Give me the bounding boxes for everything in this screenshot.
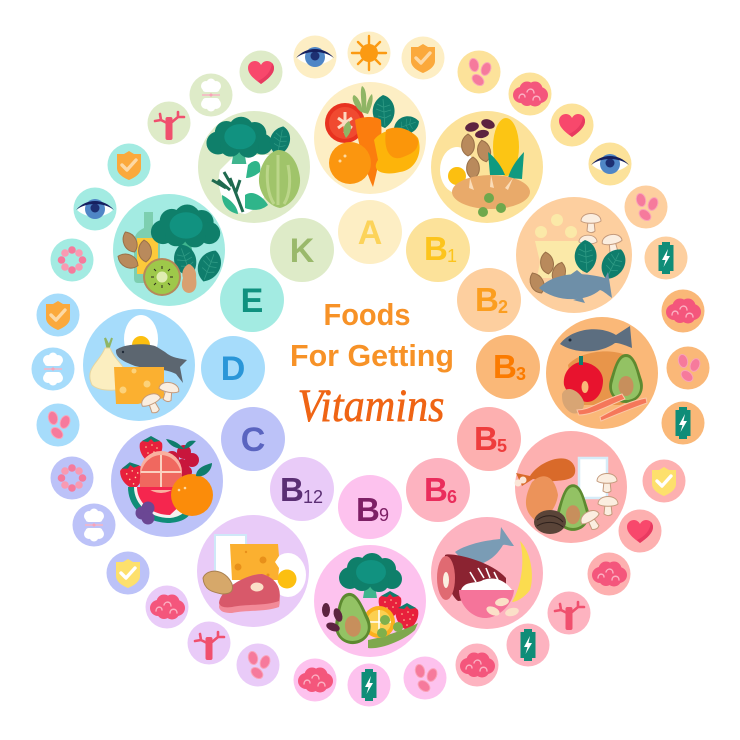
- icon: shield on B5: [642, 460, 686, 502]
- vitamin letter badges: [201, 200, 540, 539]
- badge: C: C: [241, 421, 265, 459]
- badge: E: E: [241, 282, 263, 320]
- icon: bone on D: [32, 348, 74, 390]
- icon: ring on E: [50, 238, 94, 282]
- badge: B2: [457, 268, 521, 332]
- badge: B9: [338, 475, 402, 539]
- icon: blood cells on D: [36, 404, 80, 446]
- icon: blood cells on B2: [624, 186, 668, 228]
- food circle: vitamin B12: [197, 515, 309, 627]
- badge: B12: 12: [303, 487, 323, 507]
- icon: battery on B3: [662, 402, 704, 444]
- icon: battery on B2: [644, 236, 688, 280]
- icon: bone on K: [190, 74, 232, 116]
- title: [290, 297, 454, 432]
- badge: B5: B: [474, 420, 498, 457]
- food circle: vitamin B2: [516, 197, 632, 313]
- food circle: vitamin B9: [314, 545, 426, 657]
- badge: B5: [457, 407, 521, 471]
- food circle: vitamin B1: [431, 111, 543, 223]
- icon: ring on C: [50, 456, 94, 500]
- icon: shield on vitamin A: [402, 36, 444, 80]
- badge: E: [220, 268, 284, 332]
- icon: vessel on B6: [548, 592, 590, 634]
- title: Foods: [324, 297, 410, 332]
- badge: B5: 5: [497, 436, 507, 456]
- icon: heart on K: [240, 50, 282, 94]
- badge: B9: B: [356, 491, 380, 528]
- icon: brain on B1: [508, 72, 552, 116]
- badge: B1: 1: [447, 246, 457, 266]
- icon: blood cells on B1: [458, 50, 500, 94]
- badge: B12: [270, 457, 334, 521]
- badge: B3: 3: [516, 364, 526, 384]
- badge: A: A: [358, 214, 382, 252]
- food circle: vitamin D: [83, 309, 195, 421]
- food circle: vitamin C: [111, 425, 223, 537]
- badge: B9: 9: [379, 505, 389, 525]
- icon: blood cells on B12: [236, 644, 280, 686]
- icon: bone on C: [72, 504, 116, 546]
- food circle: vitamin A: [314, 82, 426, 194]
- icon: brain on B5: [588, 552, 630, 596]
- food circle: vitamin B3: [546, 317, 658, 429]
- food circle: vitamin B6: [431, 517, 543, 629]
- badge: K: K: [290, 232, 315, 270]
- icon: brain on B9: [294, 658, 336, 702]
- badge: D: D: [221, 350, 245, 388]
- icon: shield on D: [36, 294, 80, 336]
- title: Vitamins: [298, 380, 444, 432]
- icon: shield on K: [108, 144, 150, 186]
- badge: B2: B: [475, 281, 499, 318]
- title: For Getting: [290, 338, 454, 373]
- badge: B6: [406, 458, 470, 522]
- icon: vessel on K: [148, 102, 190, 144]
- icon: eye on vitamin A: [294, 36, 336, 78]
- badge: B6: 6: [447, 487, 457, 507]
- icon: blood cells on B9: [404, 656, 446, 700]
- icon: eye on E: [74, 188, 116, 230]
- icon: brain on B6: [456, 644, 498, 686]
- food circle: vitamin E: [113, 194, 226, 306]
- badge: B3: B: [493, 348, 517, 385]
- icon: shield on C: [106, 552, 150, 594]
- icon: eye on B1: [588, 142, 632, 186]
- icon: brain on B3: [662, 290, 704, 332]
- icon: blood cells on B3: [666, 346, 710, 390]
- icon: brain on B12: [146, 586, 188, 628]
- food circle: vitamin K: [198, 111, 310, 223]
- icon: vessel on B12: [188, 622, 230, 664]
- badge: B1: B: [424, 230, 448, 267]
- badge: B12: B: [280, 471, 304, 508]
- badge: C: [221, 407, 285, 471]
- badge: B2: 2: [498, 297, 508, 317]
- badge: B1: [406, 218, 470, 282]
- icon: heart on B1: [550, 104, 594, 146]
- badge: K: [270, 218, 334, 282]
- icon: sun on vitamin A: [348, 32, 390, 74]
- badge: B3: [476, 335, 540, 399]
- food circle: vitamin B5: [514, 431, 627, 543]
- badge: D: [201, 336, 265, 400]
- icon: heart on B5: [618, 510, 662, 552]
- icon: battery on B9: [348, 664, 390, 706]
- badge: A: [338, 200, 402, 264]
- icon: battery on B6: [506, 624, 550, 666]
- badge: B6: B: [424, 471, 448, 508]
